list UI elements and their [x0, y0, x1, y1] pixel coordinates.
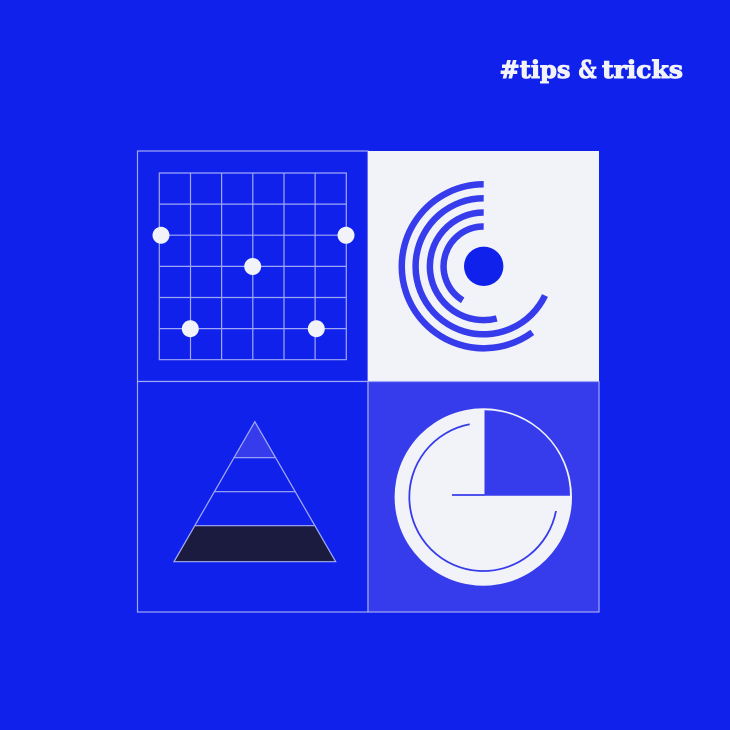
panel: pie chart: [368, 382, 599, 612]
pyramid outline: [174, 422, 336, 562]
panel: grid with dots: [138, 151, 368, 382]
pie thin arc: [409, 424, 556, 571]
title: tricks: [602, 55, 683, 84]
panel: radial arcs: [368, 151, 599, 382]
pie quarter slice: [484, 410, 570, 496]
icon: centre dot: [464, 247, 503, 286]
pyramid top tier: [234, 422, 276, 458]
pie tick line: [452, 494, 484, 496]
panel: pyramid: [138, 382, 368, 612]
pie disc: [395, 408, 572, 586]
icon: concentric arcs: [402, 184, 545, 348]
icon: data dots: [152, 227, 354, 337]
title: &: [578, 55, 596, 84]
title: [500, 55, 683, 84]
title: #tips: [500, 55, 570, 84]
pyramid base tier: [174, 526, 336, 562]
